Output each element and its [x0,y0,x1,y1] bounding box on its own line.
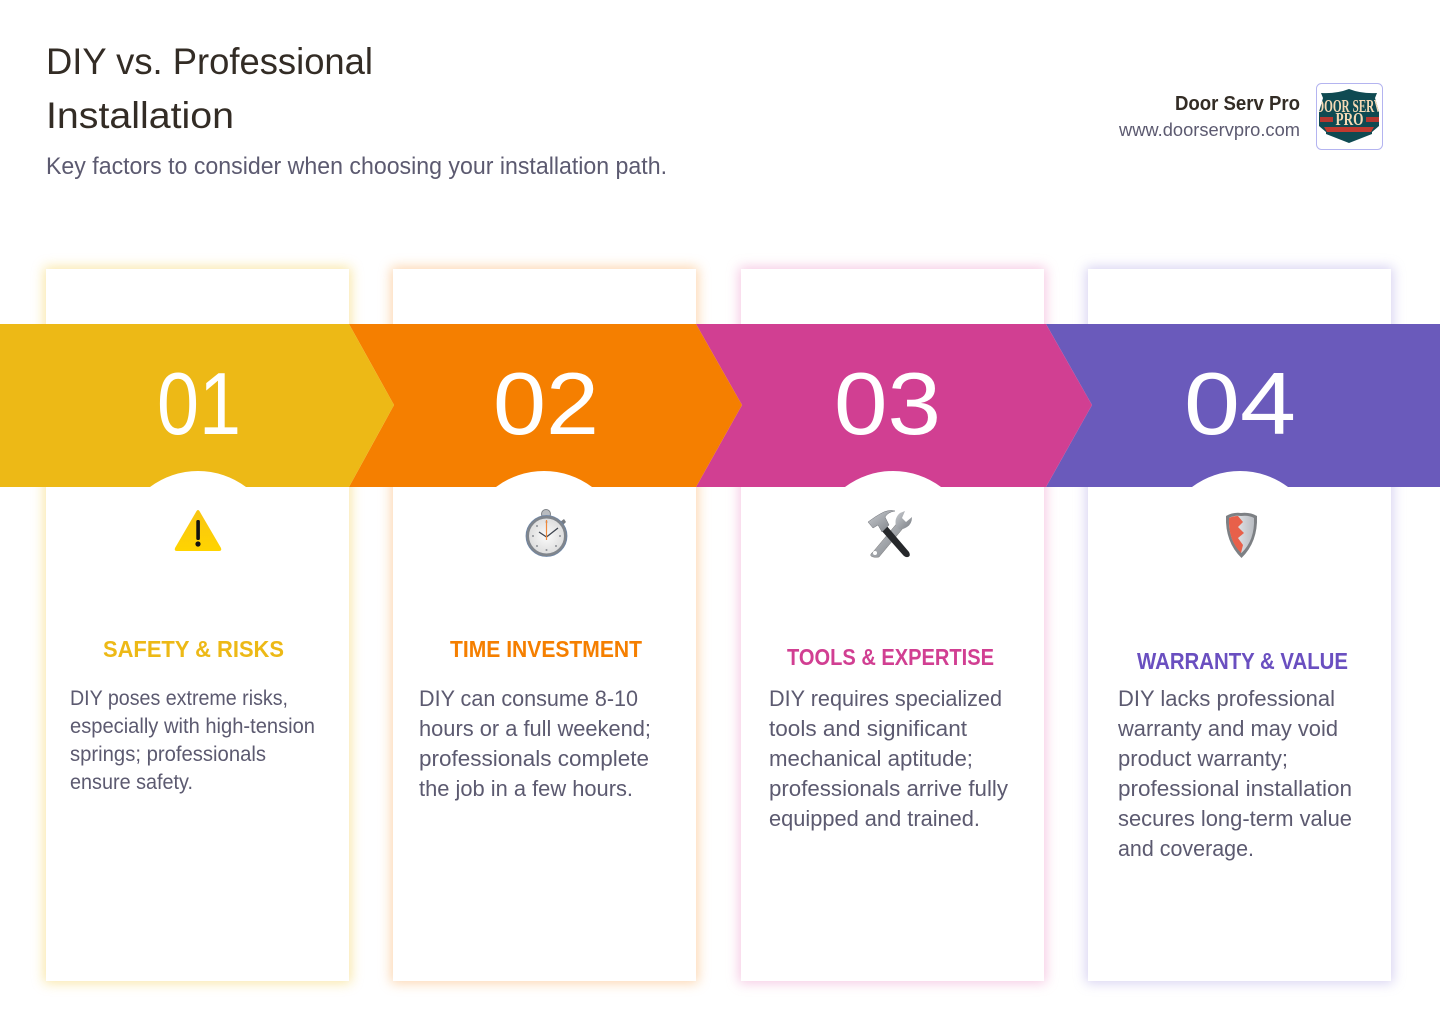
panel: tools card [741,269,1044,981]
text: tools description [769,686,1009,831]
title: Installation [46,94,234,136]
text: tools description: DIY requires specialized [769,686,1002,711]
subtitle: Key factors to consider when choosing your installation path. [46,153,667,180]
heading: safety and risks: SAFETY & RISKS [103,636,284,662]
number 03: 03 [834,354,941,453]
icon notch 1 [150,471,246,487]
text: time description: the job in a few hours. [419,776,633,801]
text: tools description: equipped and trained. [769,806,980,831]
text: warranty description: DIY lacks professional [1118,686,1335,711]
icon: stopwatch [526,510,567,556]
arrow band 4 [1046,324,1440,487]
arrow band 3 [696,324,1092,487]
number 04: 04 [1184,354,1296,453]
brand name and website: www.doorservpro.com [1118,119,1300,140]
text: safety description: ensure safety. [70,771,193,794]
text: safety description: DIY poses extreme risks, [70,687,288,710]
heading: tools and expertise: TOOLS & EXPERTISE [787,644,994,670]
text: warranty description: professional installation [1118,776,1352,801]
text: warranty description: warranty and may void [1117,716,1338,741]
text: tools description: professionals arrive fully [769,776,1009,801]
icon: warning triangle [175,510,221,551]
text: time description: hours or a full weekend; [419,716,651,741]
text: safety description [70,687,315,794]
icon notch 4 [1192,471,1288,487]
heading: warranty and value: WARRANTY & VALUE [1137,648,1348,674]
text: safety description: especially with high-tension [70,715,315,738]
icon: hammer and wrench [868,510,912,557]
card 1 glow [44,267,351,983]
text: tools description: tools and significant [769,716,968,741]
text: tools description: mechanical aptitude; [769,746,973,771]
logo: DOOR SERV [1316,96,1382,116]
text: warranty description: product warranty; [1118,746,1288,771]
text: warranty description [1117,686,1352,861]
panel: warranty card [1088,269,1391,981]
title [46,40,373,136]
text: warranty description: and coverage. [1118,836,1254,861]
panel: time card [393,269,696,981]
text: time description [419,686,651,801]
number 02: 02 [493,354,599,453]
brand name and website [1118,93,1300,140]
icon: shield [1226,513,1257,558]
brand name and website: Door Serv Pro [1175,93,1300,115]
text: warranty description: secures long-term value [1118,806,1352,831]
heading: time investment: TIME INVESTMENT [450,636,642,662]
card 3 glow [739,267,1046,983]
arrow band 2 [349,324,742,487]
logo [1316,84,1382,150]
card 2 glow [391,267,698,983]
text: time description: professionals complete [419,746,649,771]
panel: safety card [46,269,349,981]
logo: PRO [1336,109,1364,129]
arrow band 1 [0,324,394,487]
icon notch 2 [496,471,592,487]
title: DIY vs. Professional [46,40,373,82]
card 4 glow [1086,267,1393,983]
text: safety description: springs; professionals [70,743,266,766]
icon notch 3 [845,471,941,487]
text: time description: DIY can consume 8-10 [419,686,638,711]
number 01: 01 [157,354,241,453]
